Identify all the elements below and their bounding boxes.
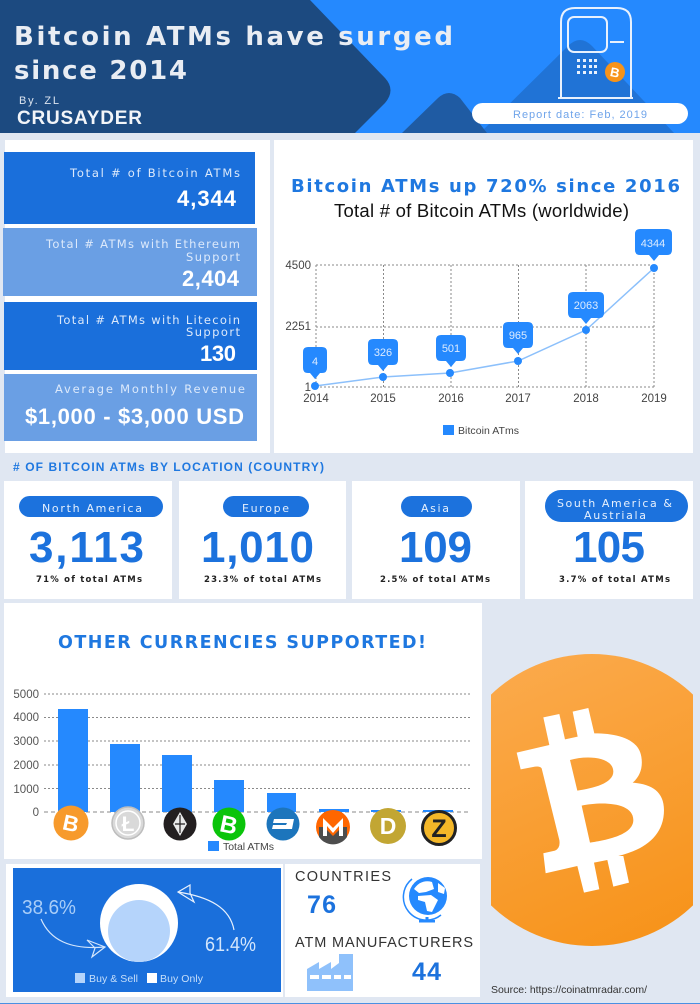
- panel: other currencies bar chart: [4, 603, 482, 859]
- bar axis labels: 2000: [13, 760, 39, 772]
- report date pill: Report date: Feb, 2019: [513, 109, 647, 121]
- header banner: [0, 0, 700, 133]
- chart legend: Bitcoin ATms: [458, 425, 519, 437]
- byline: By. ZL: [19, 95, 59, 107]
- stat: litecoin ATMs: Support: [186, 325, 240, 339]
- icon: ATM machine: B: [609, 64, 621, 81]
- pie chart: [100, 884, 178, 962]
- bar axis labels: 3000: [13, 736, 39, 748]
- title: since 2014: [14, 56, 187, 86]
- source note: Source: https://coinatmradar.com/: [491, 984, 647, 996]
- icon: bitcoin coin: [54, 806, 88, 840]
- icon: ethereum coin: [164, 808, 196, 840]
- data callouts: 4: [312, 356, 318, 368]
- stat: litecoin ATMs: Total # ATMs with Litecoin: [56, 313, 240, 327]
- card: europe: 23.3% of total ATMs: [204, 575, 321, 585]
- bar chart heading: OTHER CURRENCIES SUPPORTED!: [58, 633, 426, 653]
- chart heading: Bitcoin ATMs up 720% since 2016: [291, 176, 680, 197]
- card: asia: Asia: [421, 502, 449, 515]
- y axis labels: [285, 260, 311, 394]
- data callouts: 4344: [641, 238, 665, 250]
- panel: line chart: [274, 140, 693, 453]
- x axis labels: 2018: [573, 393, 599, 405]
- card: south america and australia: 105: [573, 523, 645, 572]
- data callouts: 965: [509, 330, 527, 342]
- card: south america and australia: [525, 481, 693, 599]
- bar axis labels: 4000: [13, 712, 39, 724]
- data callouts: 326: [374, 347, 392, 359]
- report date pill: [472, 103, 688, 124]
- mountain backdrop: [480, 40, 674, 133]
- stat: ethereum ATMs: Total # ATMs with Ethereum: [45, 237, 240, 251]
- x axis labels: 2015: [370, 393, 396, 405]
- pie legend: Buy & Sell: [89, 973, 138, 985]
- x axis labels: 2019: [641, 393, 667, 405]
- stat: monthly revenue: Average Monthly Revenue: [55, 382, 245, 396]
- manufacturers value: 44: [412, 958, 441, 986]
- y axis labels: 4500: [285, 260, 311, 272]
- icon: ATM machine: [558, 8, 633, 99]
- icon: globe: [403, 877, 447, 922]
- icon: large bitcoin logo: [491, 654, 693, 946]
- brand name: CRUSAYDER: [17, 108, 142, 129]
- stat: monthly revenue: $1,000 - $3,000 USD: [25, 404, 244, 429]
- stat: litecoin ATMs: [4, 302, 257, 370]
- x axis labels: 2017: [505, 393, 531, 405]
- icon: dogecoin coin: D: [380, 813, 396, 839]
- icon: dash coin: [266, 808, 300, 840]
- pie legend: [75, 973, 204, 985]
- x axis labels: [303, 393, 667, 405]
- arrow: to buy only: [178, 885, 234, 930]
- bar axis labels: 1000: [13, 784, 39, 796]
- label: 38.6%: 38.6%: [22, 897, 76, 919]
- x axis labels: 2016: [438, 393, 464, 405]
- countries label: COUNTRIES: [295, 869, 391, 885]
- card: asia: 2.5% of total ATMs: [380, 575, 490, 585]
- bars: [58, 709, 453, 812]
- bar axis labels: 5000: [13, 689, 39, 701]
- stat: ethereum ATMs: 2,404: [182, 266, 240, 291]
- bar axis labels: 0: [33, 807, 39, 819]
- card: europe: 1,010: [201, 523, 314, 572]
- data callouts: 2063: [574, 300, 598, 312]
- countries value: 76: [307, 891, 336, 919]
- bar axis labels: [13, 689, 39, 819]
- card: south america and australia: 3.7% of total ATMs: [559, 575, 670, 585]
- title: [14, 22, 453, 86]
- title: Bitcoin ATMs have surged: [14, 22, 453, 52]
- panel: countries and manufacturers: [285, 864, 480, 997]
- icon: monero coin: [316, 810, 350, 844]
- icon: zcash coin: Z: [431, 815, 447, 843]
- card: north america: 71% of total ATMs: [36, 575, 142, 585]
- pie legend: Buy Only: [160, 973, 204, 985]
- card: asia: [352, 481, 520, 599]
- card: europe: [179, 481, 346, 599]
- stat: total bitcoin ATMs: Total # of Bitcoin ATMs: [69, 166, 240, 180]
- panel: key stats: [3, 140, 270, 453]
- panel: location cards: [4, 481, 693, 599]
- icon: factory: [307, 954, 353, 991]
- manufacturers label: ATM MANUFACTURERS: [295, 935, 473, 951]
- arrow: to buy and sell: [41, 919, 105, 957]
- card: asia: 109: [399, 523, 472, 572]
- data callouts: 501: [442, 343, 460, 355]
- icon: dogecoin coin: [370, 808, 406, 844]
- panel: buy and sell pie: [6, 864, 283, 997]
- stat: monthly revenue: [4, 374, 257, 441]
- icon: bitcoin cash coin: [212, 808, 246, 840]
- icon: zcash coin: [422, 812, 456, 844]
- icon: bitcoin cash coin: B: [217, 810, 240, 840]
- card: north america: 3,113: [29, 523, 144, 572]
- bar chart legend: Total ATMs: [223, 841, 274, 853]
- stat: total bitcoin ATMs: 4,344: [177, 186, 237, 211]
- label: 61.4%: 61.4%: [205, 934, 256, 956]
- card: north america: [4, 481, 172, 599]
- y axis labels: 2251: [285, 321, 311, 333]
- y axis labels: 1: [305, 382, 311, 394]
- icon: bitcoin coin: B: [61, 810, 81, 837]
- card: north america: North America: [42, 502, 142, 515]
- card: south america and australia: Austriala: [584, 509, 646, 522]
- icon: litecoin coin: Ł: [122, 813, 135, 836]
- card: europe: Europe: [242, 502, 289, 515]
- icon: litecoin coin: [112, 807, 144, 839]
- section heading: location: # OF BITCOIN ATMs BY LOCATION (COUNTRY): [13, 460, 324, 474]
- stat: litecoin ATMs: 130: [200, 341, 236, 366]
- line series: [311, 264, 658, 390]
- stat: ethereum ATMs: [3, 228, 257, 296]
- x axis labels: 2014: [303, 393, 329, 405]
- stat: ethereum ATMs: Support: [186, 250, 240, 264]
- card: south america and australia: South America &: [557, 497, 672, 510]
- stat: total bitcoin ATMs: [4, 152, 255, 224]
- data callouts: [303, 229, 672, 379]
- chart subtitle: Total # of Bitcoin ATMs (worldwide): [334, 200, 629, 221]
